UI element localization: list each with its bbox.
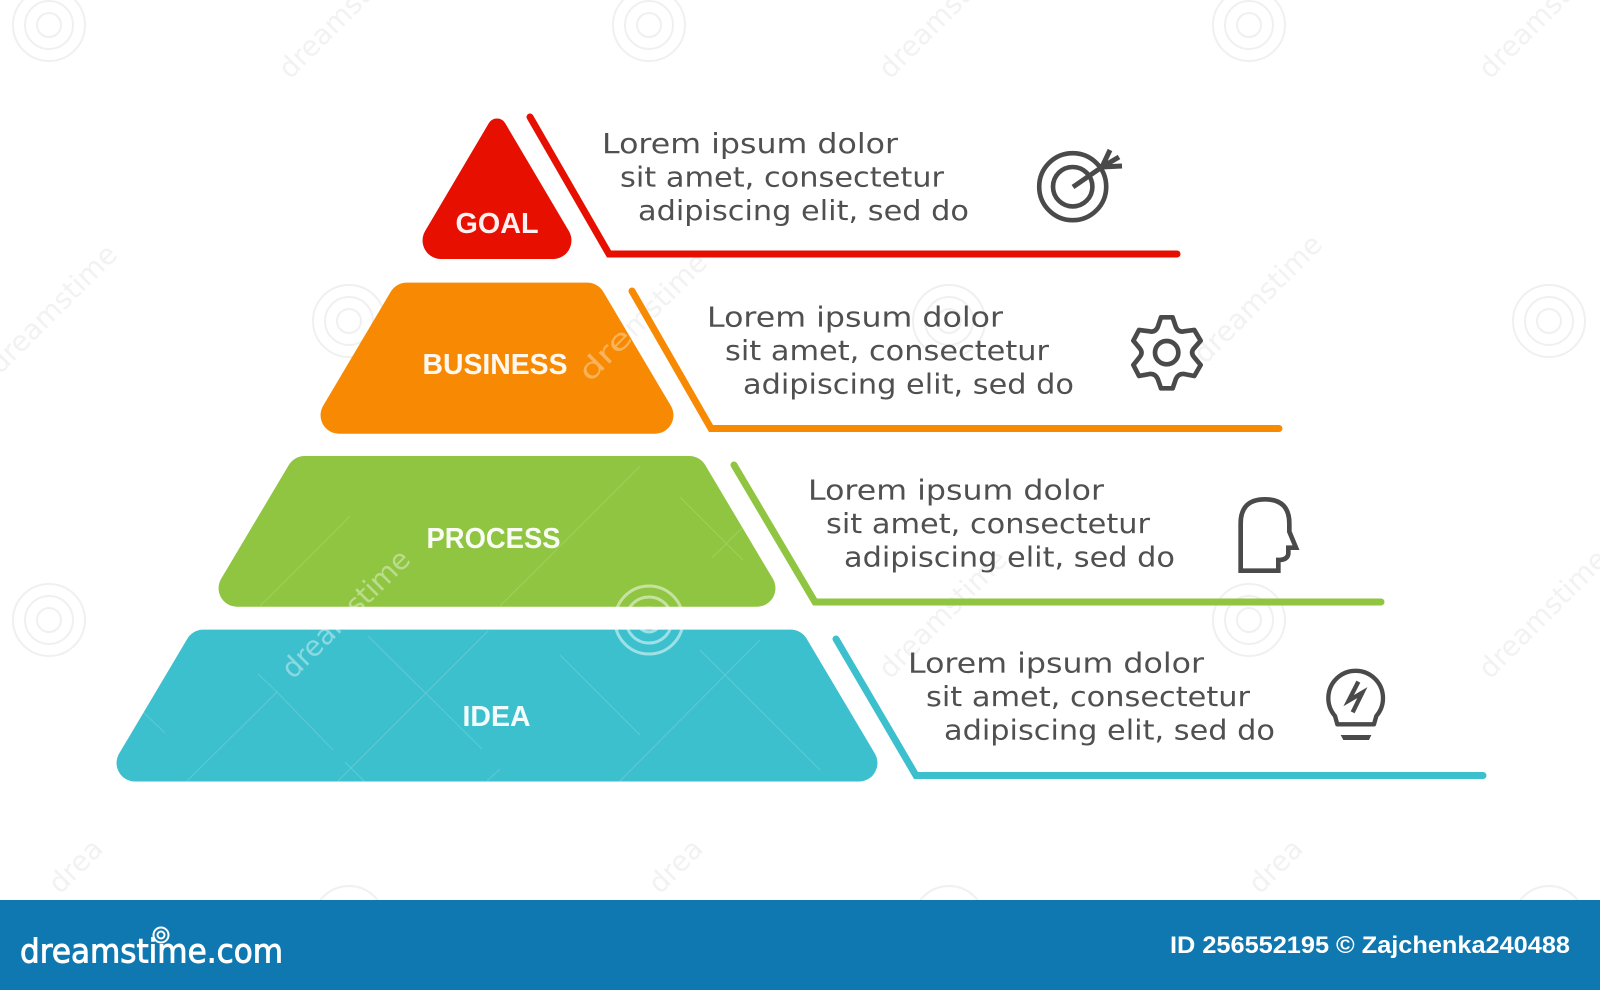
watermark on background: drea <box>642 832 710 900</box>
footer logo spiral <box>154 928 168 942</box>
panel: process tier <box>219 456 775 607</box>
icon: gear <box>1133 317 1201 388</box>
watermark on background: dreamstime <box>872 543 1014 685</box>
icon: target with arrow <box>1039 150 1122 220</box>
icon: head profile <box>1241 499 1296 571</box>
watermark over idea tier <box>143 631 820 781</box>
footer credit: ID 256552195 © Zajchenka240488 <box>1170 932 1570 959</box>
business text: sit amet, consectetur <box>725 335 1050 367</box>
process text: sit amet, consectetur <box>826 508 1151 540</box>
business trapezoid <box>321 283 673 434</box>
panel: business tier <box>321 283 673 434</box>
idea trapezoid <box>117 630 877 782</box>
watermark text across process and idea tiers: dreamstime <box>275 543 417 685</box>
watermark on background: drea <box>42 832 110 900</box>
panel: goal tier <box>423 119 571 259</box>
watermark on background: dreamstime <box>1187 228 1329 370</box>
watermark spiral over idea tier <box>615 586 683 654</box>
process bracket line <box>734 465 1381 602</box>
process label: PROCESS <box>426 523 560 555</box>
idea label: IDEA <box>462 701 530 733</box>
business text: adipiscing elit, sed do <box>743 368 1074 400</box>
goal bracket line <box>530 117 1177 254</box>
idea text: adipiscing elit, sed do <box>944 714 1275 746</box>
process text: Lorem ipsum dolor <box>808 474 1105 506</box>
goal label: GOAL <box>456 208 538 240</box>
watermark on process <box>260 466 743 606</box>
idea text: Lorem ipsum dolor <box>908 648 1205 680</box>
business label: BUSINESS <box>422 349 568 381</box>
business bracket line <box>632 291 1279 428</box>
business text: Lorem ipsum dolor <box>707 302 1004 334</box>
footer bar <box>0 900 1600 990</box>
watermark on background: dreamstime <box>572 246 714 388</box>
watermark on background: drea <box>1242 832 1310 900</box>
goal text: Lorem ipsum dolor <box>602 128 899 160</box>
idea bracket line <box>836 639 1483 776</box>
process text: adipiscing elit, sed do <box>844 542 1175 574</box>
process trapezoid <box>219 456 775 607</box>
watermark text on business: dre <box>572 321 639 388</box>
goal text: adipiscing elit, sed do <box>638 195 969 227</box>
idea text: sit amet, consectetur <box>926 681 1251 713</box>
goal text: sit amet, consectetur <box>620 162 945 194</box>
icon: light bulb <box>1328 671 1383 740</box>
panel: idea tier <box>117 543 877 782</box>
goal triangle <box>423 119 571 259</box>
footer logo text: dreamstime.com <box>20 932 283 970</box>
